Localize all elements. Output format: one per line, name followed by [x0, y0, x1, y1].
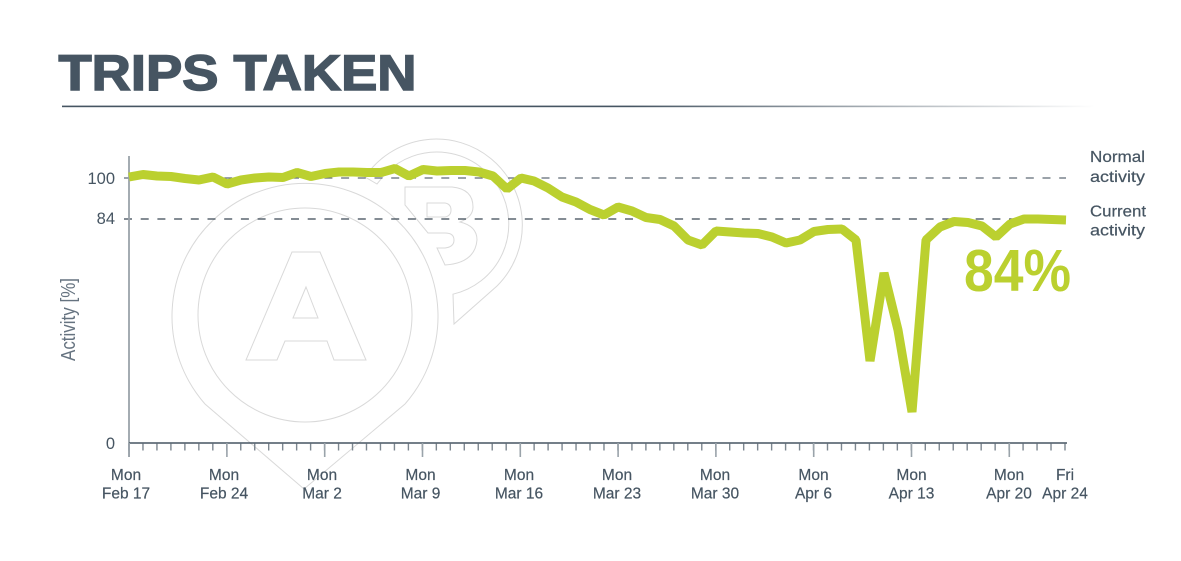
x axis date labels: Fri	[1056, 467, 1074, 484]
x axis date labels: Apr 13	[889, 486, 934, 502]
axes and ticks	[128, 156, 1068, 457]
x axis date labels	[102, 467, 1088, 502]
x axis date labels: Mon	[700, 467, 730, 484]
y axis value labels: 100	[87, 170, 115, 188]
reference line labels: Current	[1090, 204, 1147, 220]
x axis date labels: Mon	[405, 467, 436, 484]
x axis date labels: Apr 6	[795, 486, 832, 502]
x axis date labels: Feb 17	[102, 486, 150, 502]
callout: 84%: 84%	[964, 238, 1071, 304]
x axis date labels: Mar 23	[593, 486, 641, 502]
reference line labels: activity	[1090, 169, 1145, 186]
x axis date labels: Mon	[798, 467, 829, 484]
x axis date labels: Mar 2	[302, 486, 342, 502]
reference line labels: activity	[1090, 222, 1145, 240]
activity line chart	[129, 168, 1066, 412]
x axis date labels: Mon	[602, 467, 632, 484]
x axis date labels: Mon	[994, 467, 1024, 484]
reference line labels: Normal	[1090, 149, 1145, 166]
x axis date labels: Mon	[896, 467, 927, 484]
y axis value labels: 0	[106, 435, 115, 453]
reference lines: normal and current activity	[124, 178, 1066, 219]
x axis date labels: Mon	[209, 467, 239, 484]
reference line labels	[1090, 149, 1147, 240]
title underline	[62, 106, 1095, 107]
x axis date labels: Mar 30	[691, 486, 739, 502]
x axis date labels: Mar 16	[495, 486, 543, 502]
x axis date labels: Apr 24	[1042, 486, 1088, 502]
y axis title: Activity [%]	[58, 278, 80, 361]
watermark: pin A	[172, 183, 438, 489]
x axis date labels: Mon	[504, 467, 534, 484]
x axis date labels: Mar 9	[401, 486, 440, 502]
watermark: pin B	[365, 139, 522, 324]
x axis date labels: Mon	[111, 467, 141, 484]
x axis date labels: Feb 24	[200, 486, 249, 502]
x axis date labels: Mon	[307, 467, 337, 484]
x axis date labels: Apr 20	[986, 486, 1032, 502]
title: TRIPS TAKEN	[58, 45, 416, 101]
y axis value labels: 84	[97, 210, 115, 228]
y axis value labels	[87, 170, 115, 453]
